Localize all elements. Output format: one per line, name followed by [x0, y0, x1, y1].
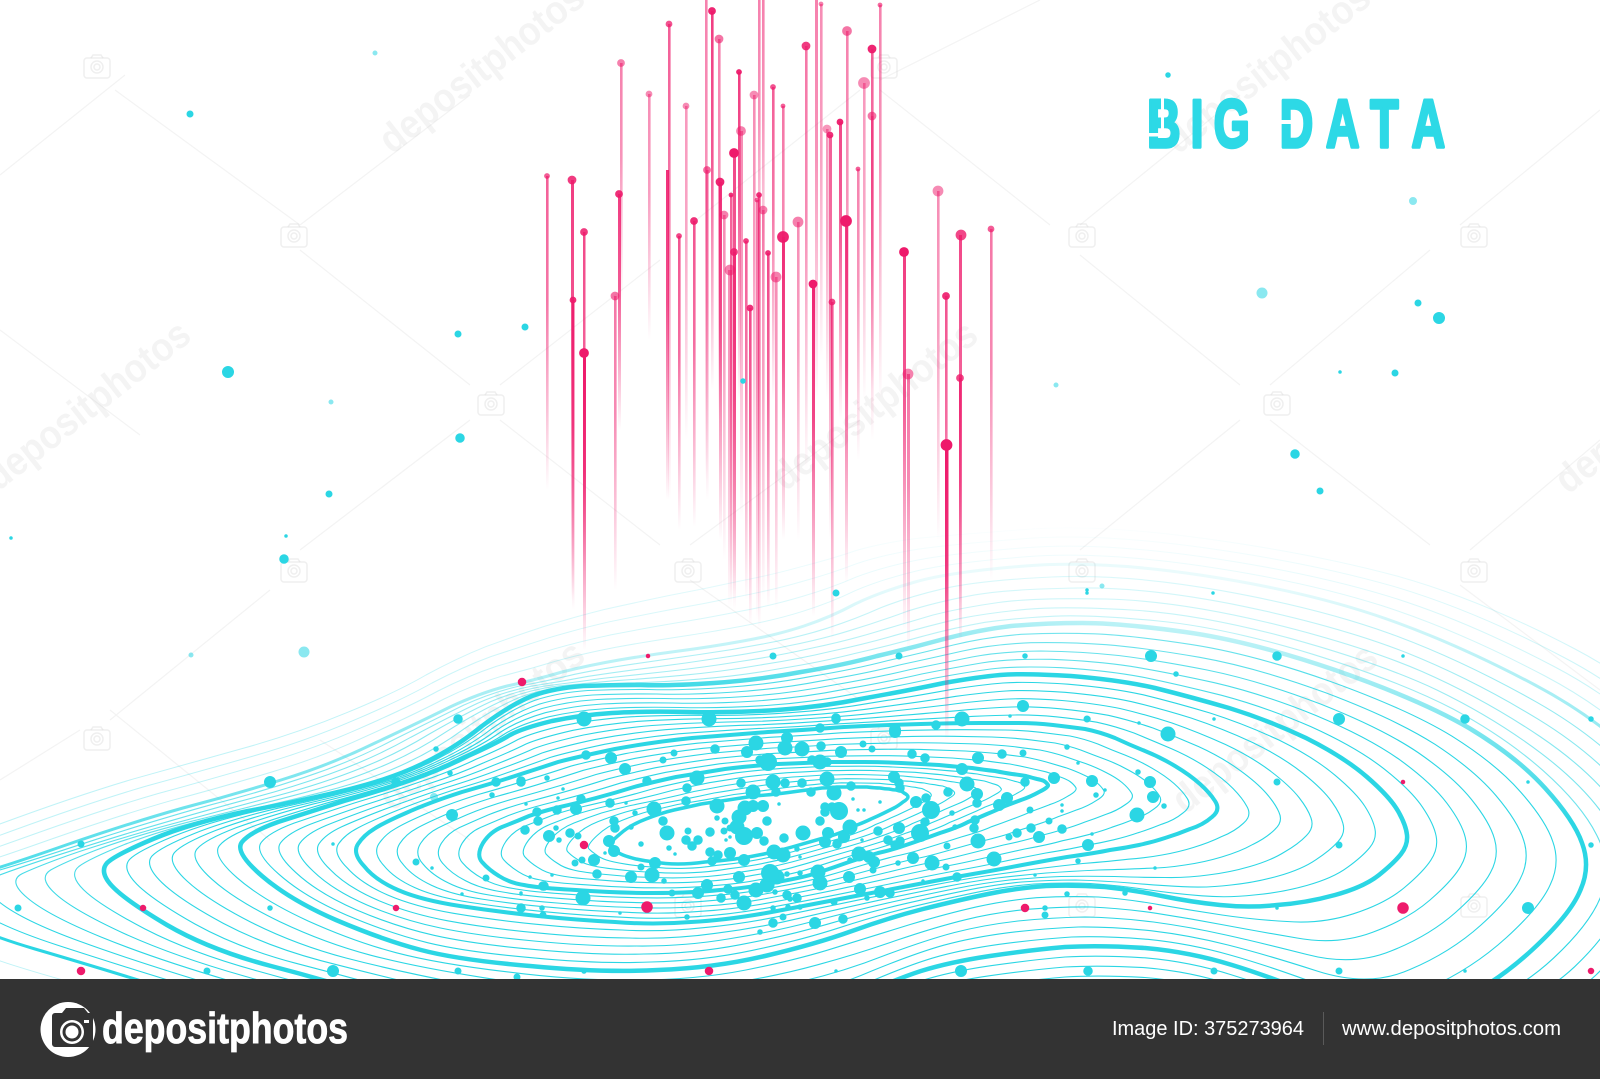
outer thick contour — [0, 564, 1600, 1074]
second band thin contours — [127, 633, 1556, 1026]
medium-small dots — [18, 114, 1465, 977]
big dots — [583, 719, 1168, 903]
logo wordmark: depositphotos — [102, 1004, 348, 1053]
contour map: concentric teal lines — [0, 528, 1600, 1074]
small dots — [270, 75, 1591, 971]
scattered faint teal dots — [191, 53, 1413, 797]
website: www.depositphotos.com — [1341, 1018, 1561, 1040]
logo badge: camera in white circle — [40, 1002, 96, 1057]
magenta accent dots — [81, 656, 1591, 971]
inner band thin contours — [260, 682, 1375, 963]
magenta data lines with round heads — [544, 0, 994, 740]
biggest dots — [744, 762, 931, 873]
watermark stamps: depositphotos — [1163, 635, 1386, 822]
outer band thin contours — [0, 576, 1600, 1068]
large dots — [228, 318, 1528, 971]
watermark stamps: depositphotos — [763, 312, 986, 499]
tiny dots — [11, 372, 1528, 971]
medium dots — [284, 438, 1465, 971]
title: BIG DATA: BIG DATA — [1147, 86, 1445, 162]
watermark stamps: depositphotos — [370, 632, 593, 819]
inner thick contours — [240, 674, 1407, 971]
image id: Image ID: 375273964 — [1112, 1018, 1304, 1040]
fading thick contour — [104, 623, 1586, 1040]
footer bar — [0, 979, 1600, 1079]
outermost faint contours — [0, 528, 1600, 1073]
